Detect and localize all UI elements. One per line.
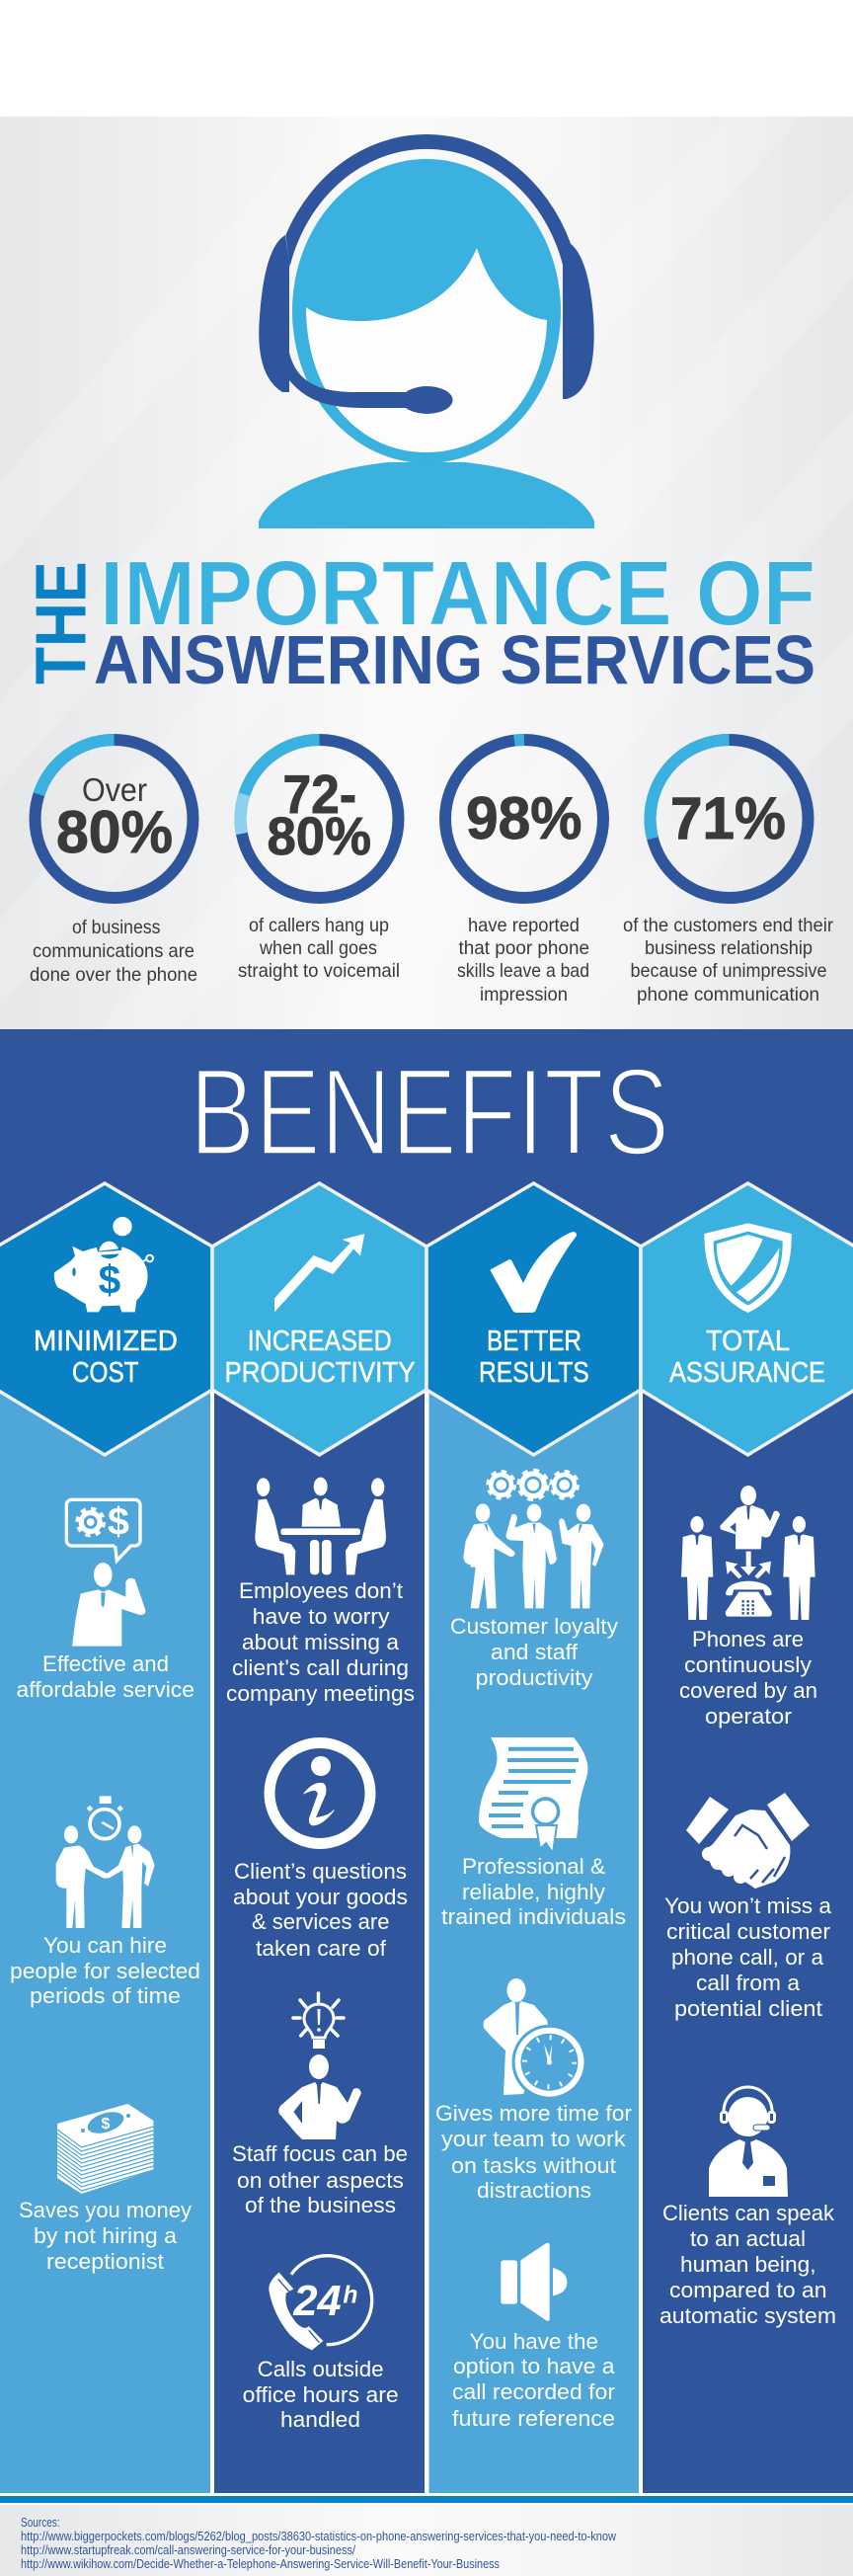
panel: column 3 items: option to have a	[453, 2354, 615, 2378]
panel: statistic 2: 72-	[282, 764, 356, 825]
panel: column 2 items: & services are	[252, 1909, 389, 1934]
panel: column 3 items: your team to work	[441, 2127, 627, 2151]
icon: speaker	[501, 2243, 567, 2321]
panel: statistic 3: that poor phone	[458, 937, 589, 959]
panel: column 3 items	[435, 1470, 632, 2431]
panel: column 1 items: Saves you money	[19, 2198, 192, 2222]
icon: handshake	[686, 1793, 810, 1889]
panel: statistic 1: of business	[72, 917, 161, 938]
panel: minimized cost header	[0, 1183, 212, 1455]
panel: column 2 items: office hours are	[243, 2382, 399, 2407]
icon: 24 hour phone	[269, 2256, 372, 2350]
panel: total assurance header	[641, 1183, 853, 1455]
panel: sources footer	[0, 2505, 853, 2576]
icon: 24 hour phone: 24	[292, 2277, 342, 2325]
panel: sources footer: http://www.startupfreak.com/call-answering-service-for-your-business/	[21, 2542, 355, 2557]
panel: column 1 items: people for selected	[10, 1959, 200, 1983]
panel: column 4 items: Clients can speak	[662, 2201, 835, 2225]
panel: column 2 items: Client’s questions	[234, 1859, 407, 1884]
icon: certificate with seal	[479, 1737, 587, 1853]
icon: handshake with stopwatch	[56, 1796, 155, 1928]
panel: statistic 1: 80%	[56, 799, 173, 865]
panel: statistic 4: 71%	[670, 785, 786, 851]
donut chart: over 80%	[15, 719, 213, 919]
icon: man with gear and dollar speech bubble: $	[108, 1499, 129, 1543]
panel: column 2 items: Employees don’t	[239, 1578, 403, 1603]
panel: column 1 items: by not hiring a	[34, 2223, 178, 2248]
icon: rising arrow	[274, 1234, 364, 1312]
panel: total assurance header: TOTAL	[706, 1326, 790, 1357]
panel: column 4 items: potential client	[674, 1996, 822, 2021]
panel: column 3 items: future reference	[452, 2406, 615, 2431]
icon: team with gears	[463, 1470, 604, 1608]
panel: statistic 1: Over	[82, 771, 147, 808]
panel: statistic 2: of callers hang up	[249, 915, 389, 936]
panel: increased productivity header: PRODUCTIVITY	[225, 1357, 415, 1389]
panel: column 3 items: Professional &	[462, 1854, 605, 1879]
panel: statistic 4: of the customers end their	[623, 915, 833, 936]
panel: statistic 3: impression	[480, 984, 568, 1006]
panel: statistic 3: skills leave a bad	[457, 960, 589, 982]
panel: column 3 items: and staff	[491, 1640, 579, 1664]
panel: column 4 items: to an actual	[690, 2226, 806, 2251]
panel: column 1 items	[10, 1499, 200, 2274]
panel: column 2 items: have to worry	[253, 1604, 390, 1629]
icon: man with gear and dollar speech bubble	[66, 1499, 145, 1647]
icon: man with clock	[484, 1978, 586, 2100]
title: THE	[22, 561, 101, 684]
panel: column 2 items: Calls outside	[258, 2357, 384, 2381]
panel: statistic 4: phone communication	[637, 984, 819, 1006]
icon: man with lightbulb idea	[278, 1993, 361, 2139]
panel: column 2 items: taken care of	[256, 1936, 387, 1961]
panel: column 4 items: automatic system	[659, 2303, 836, 2328]
panel: statistic 3: 98%	[466, 785, 582, 851]
panel: column 3 items: productivity	[476, 1665, 592, 1690]
panel: statistic 4	[623, 723, 833, 1006]
panel: better results header	[426, 1183, 641, 1455]
panel: column 3 items: reliable, highly	[462, 1880, 605, 1904]
panel: total assurance header: ASSURANCE	[669, 1357, 825, 1389]
heading: benefits: BENEFITS	[190, 1044, 669, 1181]
panel: statistic 2: 80%	[267, 807, 371, 866]
panel: sources footer: http://www.wikihow.com/Decide-Whether-a-Telephone-Answering-Service-Will-Benefit-Your-Business	[21, 2556, 500, 2571]
panel: column 2 items	[226, 1478, 415, 2432]
panel: column 3 items: Customer loyalty	[450, 1614, 618, 1639]
panel: column 1 items: periods of time	[30, 1983, 181, 2008]
icon: 24 hour phone: h	[343, 2283, 357, 2309]
donut chart: 98%	[436, 731, 612, 907]
panel: column 4 items: human being,	[680, 2252, 815, 2277]
panel: column 4 items: Phones are	[692, 1627, 804, 1651]
panel: sources footer: http://www.biggerpockets.com/blogs/5262/blog_posts/38630-statistics-on-phone-answering-services-that-you-need-to-know	[21, 2529, 617, 2543]
panel: statistic 2: straight to voicemail	[238, 960, 400, 982]
panel: sources footer: Sources:	[21, 2515, 60, 2530]
panel: column 2 items: handled	[280, 2407, 360, 2432]
panel: column 1 items: receptionist	[46, 2249, 164, 2274]
panel: column 4 items: call from a	[696, 1971, 801, 1995]
icon: check mark	[491, 1232, 577, 1313]
panel: column 4 items: You won’t miss a	[664, 1893, 832, 1918]
panel: statistic 2	[220, 719, 419, 982]
title	[22, 542, 815, 698]
panel: column 2 items: of the business	[245, 2193, 396, 2217]
panel: column 3 items: call recorded for	[452, 2379, 615, 2404]
panel: column 3 items: distractions	[477, 2178, 591, 2203]
icon: information circle	[270, 1742, 370, 1843]
panel: increased productivity header	[212, 1183, 426, 1455]
panel: column 1 items: affordable service	[16, 1677, 194, 1702]
panel: column 4 items: critical customer	[666, 1919, 830, 1944]
panel: column 4 items: covered by an	[679, 1678, 817, 1703]
panel: column 2 items: about your goods	[233, 1885, 408, 1909]
panel: statistic 4: because of unimpressive	[630, 960, 827, 982]
panel: increased productivity header: INCREASED	[248, 1326, 392, 1357]
panel: column 1 items: You can hire	[43, 1933, 167, 1958]
icon: call centre agent	[709, 2087, 788, 2197]
panel: better results header: RESULTS	[479, 1357, 589, 1389]
panel: column 2 items: on other aspects	[237, 2168, 404, 2193]
icon: stack of money	[57, 2104, 153, 2194]
icon: piggy bank	[54, 1217, 153, 1312]
panel: statistic 1: communications are	[33, 940, 194, 962]
panel: statistic 3	[436, 731, 612, 1006]
panel: column 2 items: client’s call during	[232, 1655, 409, 1680]
icon: operator with headset	[259, 134, 594, 528]
panel: column 4 items	[659, 1486, 836, 2328]
panel: column 3 items: Gives more time for	[435, 2101, 632, 2126]
panel: column 4 items: phone call, or a	[671, 1945, 824, 1970]
panel: column 4 items: continuously	[684, 1652, 812, 1677]
panel: column 1 items: Effective and	[42, 1651, 169, 1676]
panel: column 2 items: company meetings	[226, 1681, 415, 1706]
panel: column 3 items: trained individuals	[441, 1904, 626, 1929]
donut chart: 72-80%	[220, 719, 419, 919]
donut chart: 71%	[633, 723, 825, 915]
icon: stack of money: $	[102, 2116, 111, 2133]
panel: statistic 1: done over the phone	[30, 964, 197, 986]
panel: minimized cost header: COST	[72, 1357, 139, 1389]
icon: meeting at a table	[255, 1478, 386, 1574]
icon: shield	[704, 1223, 792, 1313]
panel: statistic 1	[15, 719, 213, 986]
panel: column 3 items: You have the	[470, 2329, 598, 2354]
panel: statistic 4: business relationship	[645, 937, 813, 959]
panel: column 3 items: on tasks without	[451, 2153, 616, 2178]
panel: minimized cost header: MINIMIZED	[34, 1326, 178, 1357]
icon: team routing calls to a telephone	[681, 1486, 815, 1620]
panel: column 4 items: compared to an	[669, 2278, 827, 2302]
icon: piggy bank: $	[99, 1257, 121, 1303]
title: IMPORTANCE OF	[100, 542, 815, 645]
panel: column 4 items: operator	[705, 1704, 792, 1729]
panel: benefits section	[0, 1029, 853, 2503]
panel: better results header: BETTER	[487, 1326, 582, 1357]
panel: column 2 items: about missing a	[242, 1630, 400, 1654]
panel: statistic 2: when call goes	[259, 937, 377, 959]
panel: column 2 items: Staff focus can be	[232, 2141, 408, 2166]
panel: header background	[0, 117, 853, 1029]
panel: statistic 3: have reported	[468, 915, 580, 936]
